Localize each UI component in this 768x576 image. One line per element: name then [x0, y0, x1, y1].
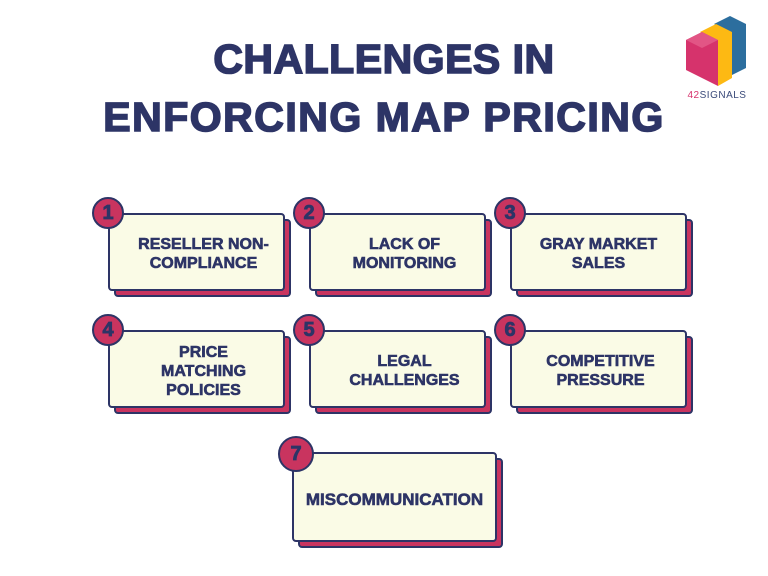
text: 3 — [504, 202, 516, 224]
title: ENFORCING MAP PRICING — [103, 94, 665, 140]
card 7 — [278, 436, 503, 548]
text: 6 — [504, 318, 516, 340]
card 6: COMPETITIVE — [546, 353, 655, 370]
card 2 — [293, 197, 492, 297]
card 5: CHALLENGES — [349, 372, 460, 389]
card 1 — [92, 197, 291, 297]
card 3: GRAY MARKET — [540, 236, 657, 253]
card 4: PRICE — [179, 344, 228, 360]
card 6 — [494, 314, 693, 414]
card 4 — [92, 314, 291, 414]
card 3 — [494, 197, 693, 297]
card 7: MISCOMMUNICATION — [306, 490, 483, 508]
card 2: LACK OF — [369, 236, 440, 253]
text: 1 — [102, 202, 114, 224]
logo: 42signals — [686, 16, 746, 101]
title: CHALLENGES IN — [213, 36, 555, 82]
card 6: PRESSURE — [556, 372, 644, 389]
card 2: MONITORING — [353, 255, 456, 272]
title — [103, 36, 665, 140]
card 3: SALES — [572, 255, 625, 272]
card 7: 7 — [290, 442, 302, 464]
card 5 — [293, 314, 492, 414]
card 5: LEGAL — [377, 353, 432, 370]
card 1: COMPLIANCE — [150, 255, 257, 272]
card 4: POLICIES — [166, 382, 241, 398]
logo: 42signals: 42SIGNALS — [688, 90, 746, 101]
text: 2 — [303, 202, 315, 224]
text: 5 — [303, 318, 315, 340]
text: 4 — [102, 318, 114, 340]
card 4: MATCHING — [161, 362, 246, 380]
card 1: RESELLER NON- — [138, 236, 269, 253]
